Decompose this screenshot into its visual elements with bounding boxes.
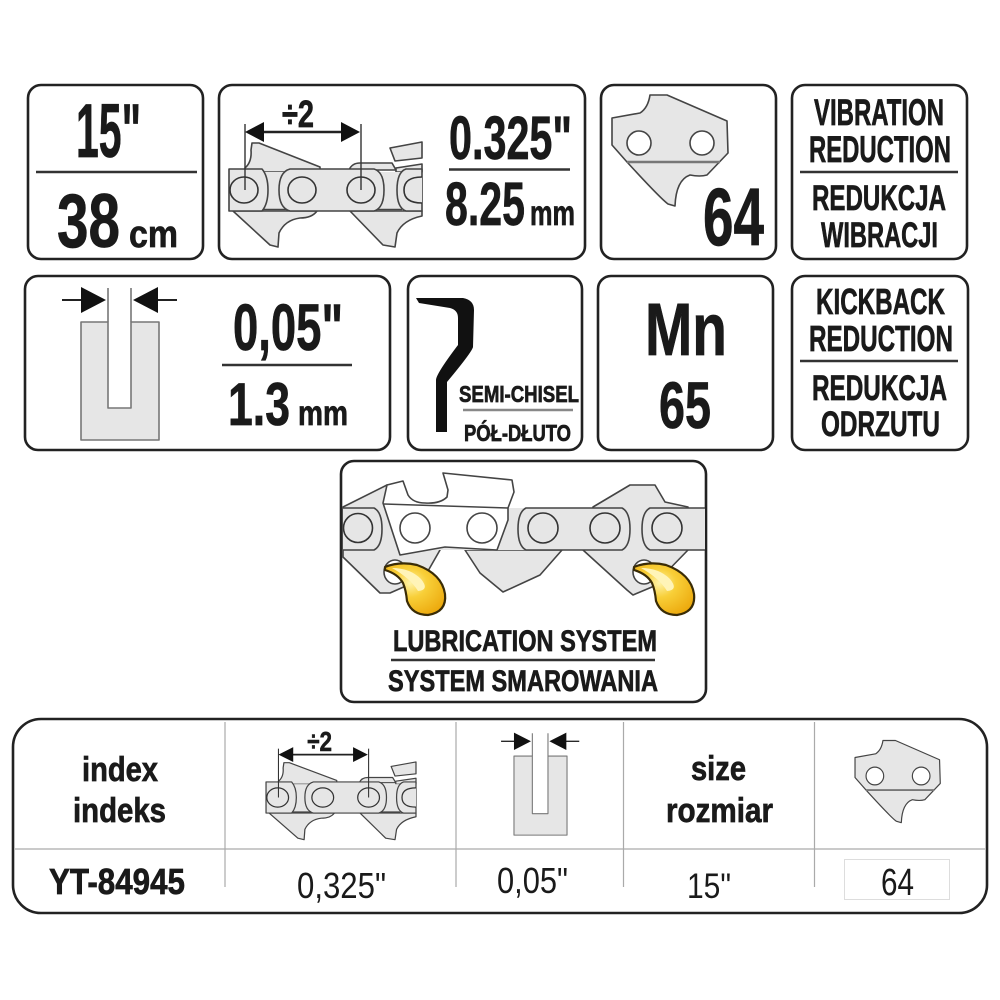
kickback reduction Polish: ODRZUTU bbox=[821, 405, 940, 444]
bar length in inches: 15" bbox=[76, 89, 141, 174]
panel: semi-chisel bbox=[408, 276, 582, 450]
icon: chain pitch diagram bbox=[229, 94, 422, 247]
icon: pitch column diagram bbox=[266, 726, 416, 840]
value: gauge: 0,05" bbox=[497, 860, 568, 901]
panel: bar length bbox=[28, 85, 203, 264]
panel: vibration reduction bbox=[792, 85, 967, 259]
icon: cutter link bbox=[612, 95, 728, 206]
panel: gauge bbox=[25, 276, 390, 450]
bar length in centimetres bbox=[57, 179, 178, 264]
steel grade: 65 bbox=[659, 368, 711, 442]
gauge in millimetres bbox=[228, 371, 348, 438]
semi-chisel English: SEMI-CHISEL bbox=[459, 381, 579, 407]
vibration reduction Polish bbox=[812, 179, 946, 255]
value: size: 15" bbox=[687, 867, 731, 906]
vibration reduction English bbox=[809, 92, 951, 170]
value: index number: YT-84945 bbox=[49, 861, 185, 902]
bar length in centimetres: cm bbox=[129, 214, 178, 256]
icon: groove gauge bbox=[62, 287, 177, 440]
panel: chain pitch bbox=[219, 85, 585, 259]
pitch in millimetres: mm bbox=[530, 194, 575, 233]
drive link count: 64 bbox=[703, 172, 764, 263]
kickback reduction English bbox=[809, 281, 953, 359]
column heading: size bbox=[666, 750, 773, 830]
kickback reduction Polish bbox=[812, 369, 947, 444]
panel: manganese steel bbox=[598, 276, 773, 450]
gauge in millimetres: mm bbox=[298, 394, 348, 433]
panel: kickback reduction bbox=[792, 276, 968, 450]
bar length in centimetres: 38 bbox=[57, 179, 120, 264]
icon: cutter column diagram bbox=[855, 740, 940, 823]
pitch in millimetres: 8.25 bbox=[445, 170, 525, 238]
gauge in millimetres: 1.3 bbox=[228, 371, 290, 438]
value: drive links bbox=[844, 860, 950, 904]
column heading: size: rozmiar bbox=[666, 792, 773, 830]
lubrication English: LUBRICATION SYSTEM bbox=[393, 625, 657, 658]
panel: lubrication system bbox=[341, 461, 706, 702]
pitch in inches: 0.325" bbox=[449, 104, 572, 172]
steel grade: Mn bbox=[645, 288, 727, 371]
value: pitch: 0,325" bbox=[297, 865, 386, 906]
icon: oil drop left bbox=[384, 560, 445, 615]
vibration reduction Polish: WIBRACJI bbox=[821, 216, 938, 255]
column heading: index: indeks bbox=[73, 792, 166, 830]
icon: oil drop right bbox=[633, 560, 694, 615]
panel: specification table bbox=[13, 719, 987, 913]
value: drive links: 64 bbox=[881, 862, 914, 904]
lubrication Polish: SYSTEM SMAROWANIA bbox=[388, 665, 658, 698]
icon: gauge column diagram bbox=[501, 733, 579, 835]
icon: lubricated saw chain bbox=[343, 473, 705, 615]
gauge in inches: 0,05" bbox=[233, 290, 343, 364]
steel grade bbox=[645, 288, 727, 442]
panel: drive links count bbox=[601, 85, 776, 263]
column heading: size: size bbox=[691, 750, 746, 788]
semi-chisel Polish: PÓŁ-DŁUTO bbox=[464, 419, 571, 446]
column heading: index: index bbox=[82, 751, 158, 789]
icon: semi-chisel profile bbox=[416, 298, 474, 432]
column heading: index bbox=[73, 751, 166, 830]
